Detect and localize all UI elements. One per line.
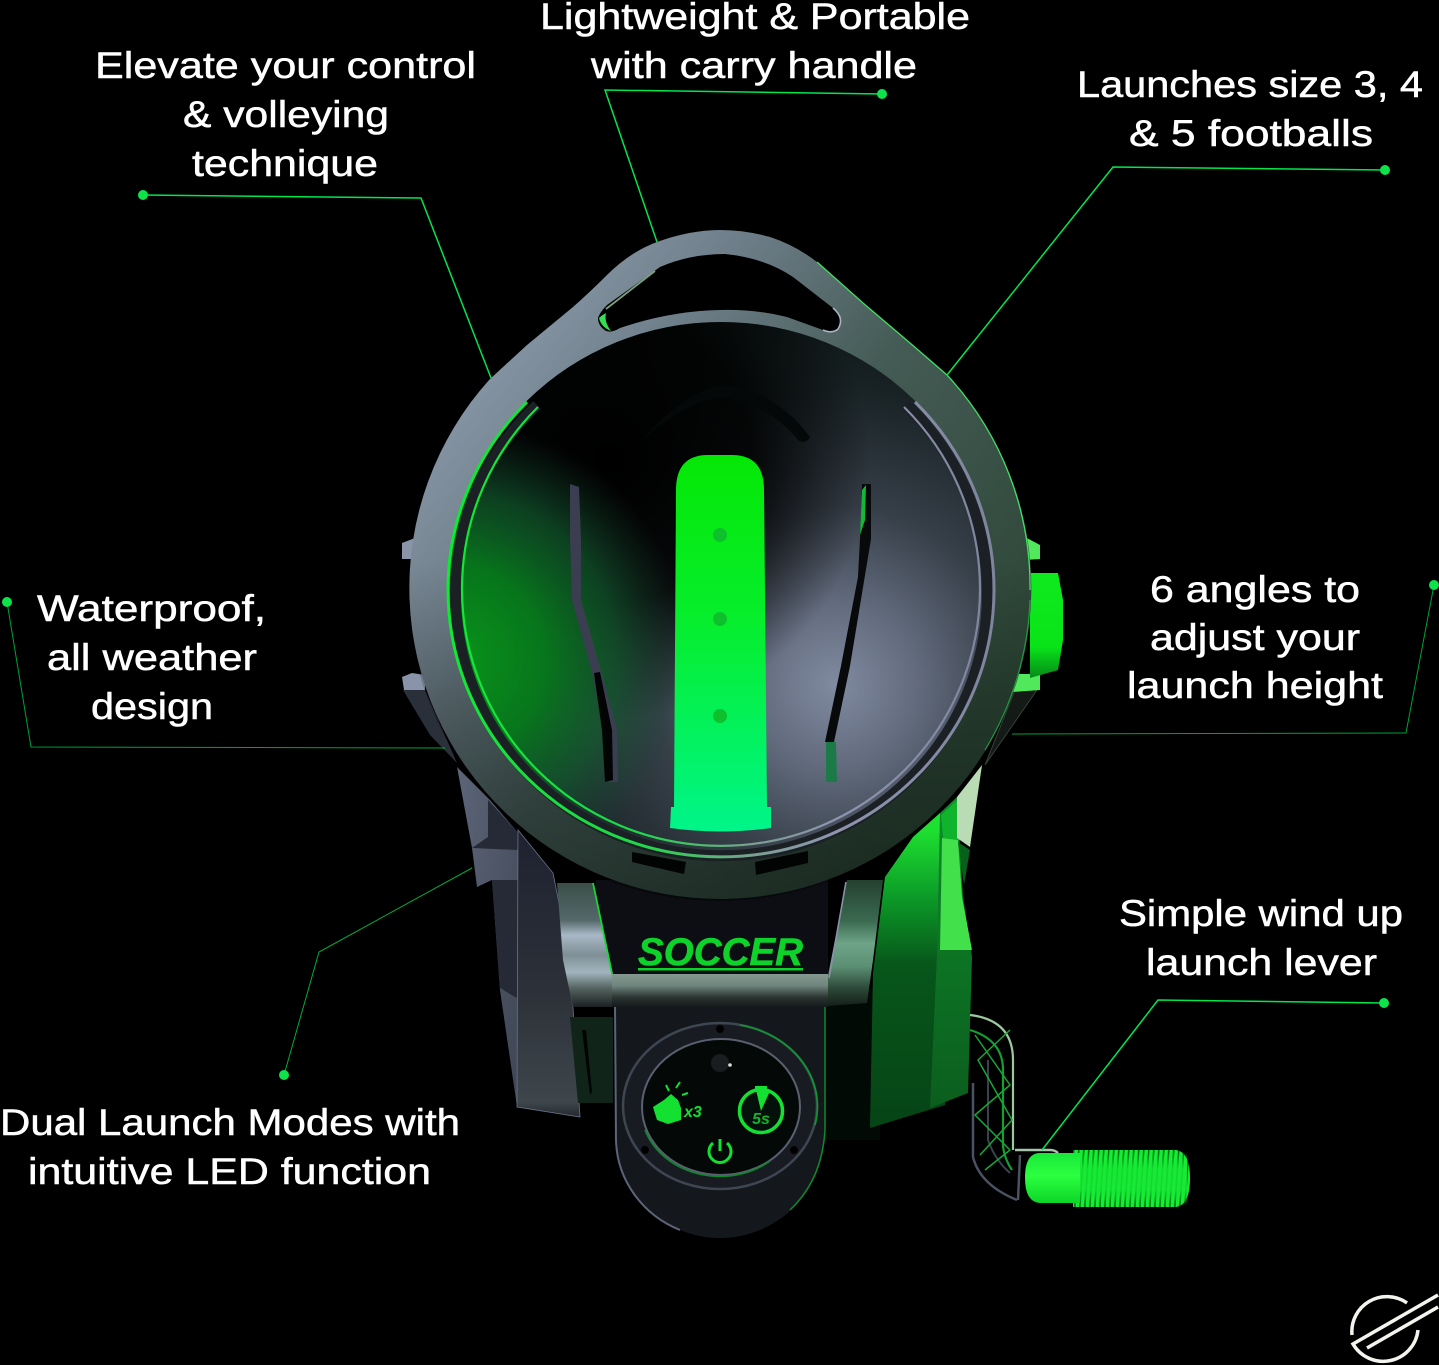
left nubs: [402, 538, 425, 690]
text: elevate: Elevate your control: [95, 45, 476, 86]
icon: 5s timer: [740, 1086, 782, 1132]
leader: lightweight: [605, 90, 882, 242]
text: waterproof: [37, 588, 266, 727]
outer ring with carry handle: [408, 230, 1031, 901]
lower ring slots: [632, 851, 808, 875]
right strut: [985, 690, 1037, 765]
left arm: [557, 883, 625, 1007]
right body pale highlight: [957, 765, 982, 847]
text: angles: 6 angles to: [1150, 569, 1360, 610]
icon: clap x3: x3: [683, 1104, 702, 1121]
text: elevate: & volleying: [183, 94, 389, 135]
text: lightweight: with carry handle: [590, 45, 917, 86]
leader: angles: [1012, 585, 1434, 734]
control panel: [623, 1023, 817, 1189]
handle upper pale glint: [606, 271, 655, 309]
handle green glint: [599, 313, 611, 331]
handle opening: [598, 254, 841, 332]
text: waterproof: Waterproof,: [37, 588, 266, 629]
lever arm: [970, 1015, 1058, 1200]
text: angles: launch height: [1127, 665, 1384, 706]
central green strip: [670, 455, 771, 832]
left rear body: [457, 767, 520, 1107]
left slot: [570, 484, 618, 782]
text: dual modes: intuitive LED function: [28, 1151, 431, 1192]
text: lightweight: [540, 0, 970, 86]
inner black shade: [447, 322, 995, 858]
leader: elevate: [143, 195, 491, 378]
text: lever: launch lever: [1146, 942, 1377, 983]
text: footballs: & 5 footballs: [1129, 113, 1373, 154]
strip dots: [713, 528, 727, 723]
plate left edge: [615, 1005, 680, 1230]
right body bright facets: [941, 800, 959, 840]
callout lines: [7, 90, 1434, 1150]
left rear recess: [472, 800, 520, 1000]
green height knob: [1030, 573, 1063, 678]
callout dots: [2, 89, 1439, 1080]
panel outer ring: [623, 1023, 817, 1189]
text: elevate: technique: [192, 143, 378, 184]
centre top panel: [596, 880, 828, 976]
device: soccer ball launcher: [402, 230, 1190, 1238]
left front plate: [517, 830, 580, 1117]
dark rear behind plate: [820, 990, 880, 1140]
arm green edge: [593, 883, 613, 978]
ring lower shade: [408, 279, 1030, 901]
leader: dual modes: [284, 868, 472, 1075]
right nubs: [1012, 537, 1040, 692]
camera lens: [711, 1054, 729, 1072]
right slot: [825, 484, 871, 782]
right arm: [815, 880, 883, 1007]
side slot block: [570, 1017, 613, 1103]
text: lever: Simple wind up: [1119, 893, 1403, 934]
text: dual modes: Dual Launch Modes with: [0, 1102, 460, 1143]
inner cavity: [447, 322, 995, 858]
text: dual modes: [0, 1102, 460, 1192]
panel face green rim: [645, 1130, 770, 1176]
handle right rim: [823, 308, 841, 332]
text: waterproof: design: [91, 686, 213, 727]
lever handle: [1025, 1150, 1190, 1207]
brand logo: [1352, 1295, 1438, 1361]
right arm lavender edge: [829, 882, 846, 978]
text: elevate: [95, 45, 476, 184]
upper curved slot: [640, 385, 810, 442]
right body side facet: [930, 797, 972, 1108]
plate right edge: [790, 1005, 825, 1210]
right green body: [870, 813, 945, 1128]
text: angles: [1127, 569, 1384, 706]
text: waterproof: all weather: [47, 637, 257, 678]
screw holes: [716, 1025, 724, 1033]
crossbar: [612, 974, 828, 1007]
text: lever: [1119, 893, 1403, 983]
centre plate: [615, 1000, 825, 1238]
text: footballs: [1077, 64, 1423, 154]
text: footballs: Launches size 3, 4: [1077, 64, 1423, 105]
right body dark notch: [958, 842, 970, 885]
icon: 5s timer: 5s: [752, 1111, 770, 1128]
icon: clap x3: [653, 1082, 702, 1124]
text: angles: adjust your: [1150, 617, 1360, 658]
lower grooves: [448, 402, 994, 857]
panel face: [642, 1039, 800, 1175]
leader: waterproof: [7, 602, 445, 748]
SOCCER label: SOCCER: [638, 931, 803, 974]
leader: footballs: [947, 167, 1385, 375]
ring right green edge: [817, 262, 1030, 590]
panel green rim: [740, 1025, 817, 1125]
leader: lever: [1042, 1000, 1384, 1150]
left struts: [403, 690, 457, 763]
icon: power: [709, 1139, 731, 1162]
ring right lower green edge: [985, 600, 1030, 750]
inner left green glow: [447, 322, 995, 858]
